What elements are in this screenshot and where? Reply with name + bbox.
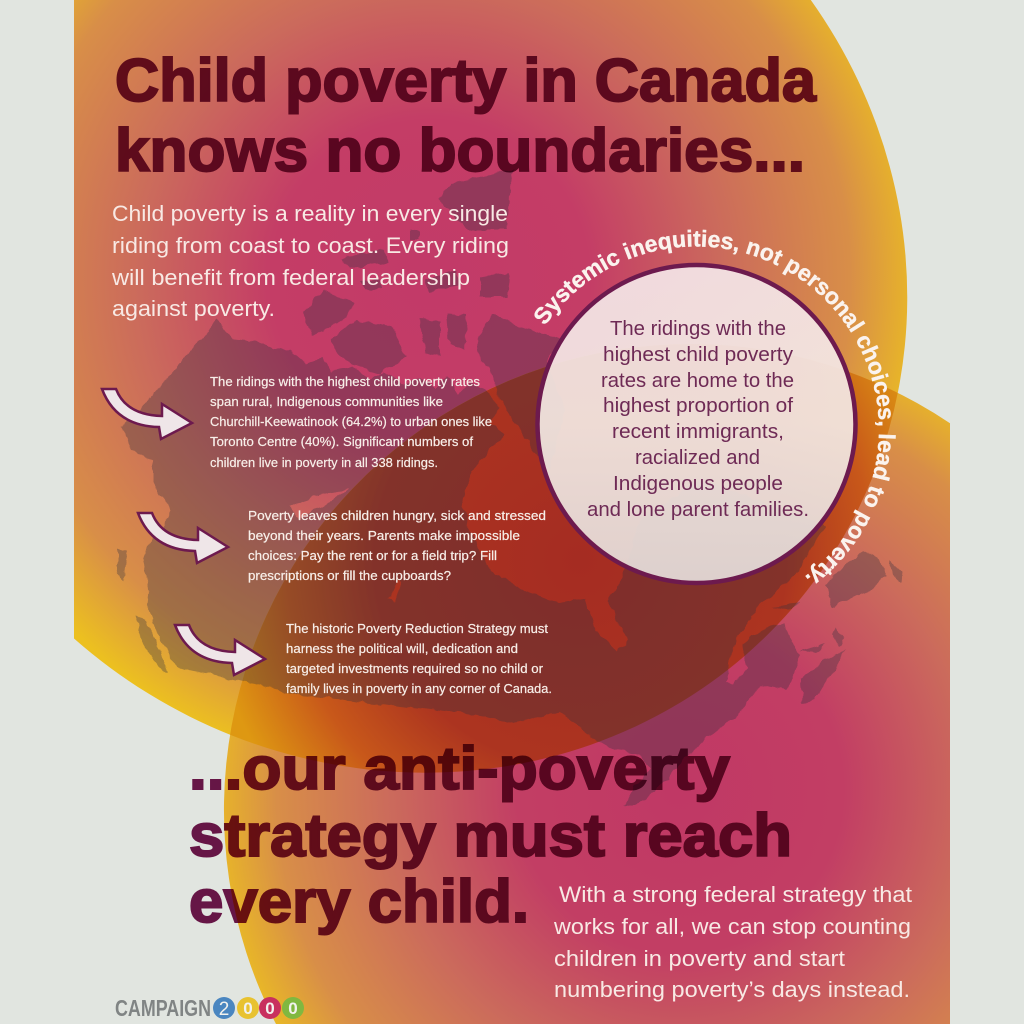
central circle callout: highest proportion of bbox=[603, 394, 793, 417]
text block: hardship: prescriptions or fill the cupboards? bbox=[248, 568, 451, 583]
arrow 1 bbox=[102, 389, 192, 439]
intro text: against poverty. bbox=[112, 296, 275, 321]
title: knows no boundaries... bbox=[115, 117, 805, 184]
logo: Campaign 2000: 0 bbox=[265, 999, 275, 1018]
logo: Campaign 2000: 0 bbox=[243, 999, 253, 1018]
central circle callout: The ridings with the bbox=[610, 317, 786, 340]
logo: Campaign 2000: 2 bbox=[219, 999, 229, 1020]
text block: strategy bbox=[286, 621, 552, 696]
intro text: Child poverty is a reality in every single bbox=[112, 201, 508, 226]
intro text: riding from coast to coast. Every riding bbox=[112, 233, 509, 258]
text block: ridings: Churchill-Keewatinook (64.2%) to urban ones like bbox=[210, 414, 492, 429]
closing text: With a strong federal strategy that bbox=[559, 882, 913, 907]
text block: ridings: children live in poverty in all 338 ridings. bbox=[210, 455, 438, 470]
map of Canada bbox=[118, 170, 903, 807]
title bbox=[115, 47, 817, 184]
closing heading: strategy must reach bbox=[189, 802, 792, 869]
logo: Campaign 2000 bbox=[115, 995, 304, 1021]
central circle callout: rates are home to the bbox=[601, 369, 794, 392]
lower gradient circle bbox=[224, 344, 950, 1024]
title: Child poverty in Canada bbox=[115, 47, 817, 114]
arrow 2 bbox=[138, 513, 228, 563]
central circle callout: highest child poverty bbox=[603, 343, 794, 366]
central circle callout bbox=[538, 265, 856, 583]
overlap lens of the two circles bbox=[230, 352, 898, 773]
intro text bbox=[111, 201, 509, 321]
text block: strategy: The historic Poverty Reduction Strategy must bbox=[286, 621, 548, 636]
intro text: will benefit from federal leadership bbox=[111, 265, 470, 290]
closing heading bbox=[189, 735, 792, 935]
arrow 3 bbox=[175, 625, 265, 675]
central circle callout: racialized and bbox=[635, 446, 760, 469]
text block: strategy: targeted investments required so no child or bbox=[286, 661, 544, 676]
text block: hardship: beyond their years. Parents make impossible bbox=[248, 528, 520, 543]
closing heading: ...our anti-poverty bbox=[189, 735, 731, 802]
text block: ridings bbox=[210, 374, 492, 470]
central circle callout: recent immigrants, bbox=[612, 420, 784, 443]
closing heading: every child. bbox=[189, 868, 529, 935]
closing text bbox=[553, 882, 913, 1002]
central circle callout: and lone parent families. bbox=[587, 498, 809, 521]
text block: hardship: choices: Pay the rent or for a field trip? Fill bbox=[248, 548, 497, 563]
text block: hardship: Poverty leaves children hungry, sick and stressed bbox=[248, 508, 546, 523]
closing text: numbering poverty’s days instead. bbox=[554, 977, 910, 1002]
closing text: works for all, we can stop counting bbox=[553, 914, 911, 939]
logo: Campaign 2000: 0 bbox=[288, 999, 298, 1018]
text block: ridings: span rural, Indigenous communities like bbox=[210, 394, 443, 409]
upper gradient circle bbox=[74, 0, 907, 773]
central circle callout: Indigenous people bbox=[613, 472, 783, 495]
text block: strategy: family lives in poverty in any corner of Canada. bbox=[286, 681, 552, 696]
text block: ridings: The ridings with the highest child poverty rates bbox=[210, 374, 480, 389]
curved text around circle: Systemic inequities, not personal choices, lead to poverty. bbox=[534, 230, 896, 584]
text block: hardship bbox=[248, 508, 546, 583]
text block: ridings: Toronto Centre (40%). Significant numbers of bbox=[210, 434, 473, 449]
text block: strategy: harness the political will, dedication and bbox=[286, 641, 518, 656]
logo: Campaign 2000: CAMPAIGN bbox=[115, 995, 211, 1021]
closing text: children in poverty and start bbox=[554, 946, 846, 971]
